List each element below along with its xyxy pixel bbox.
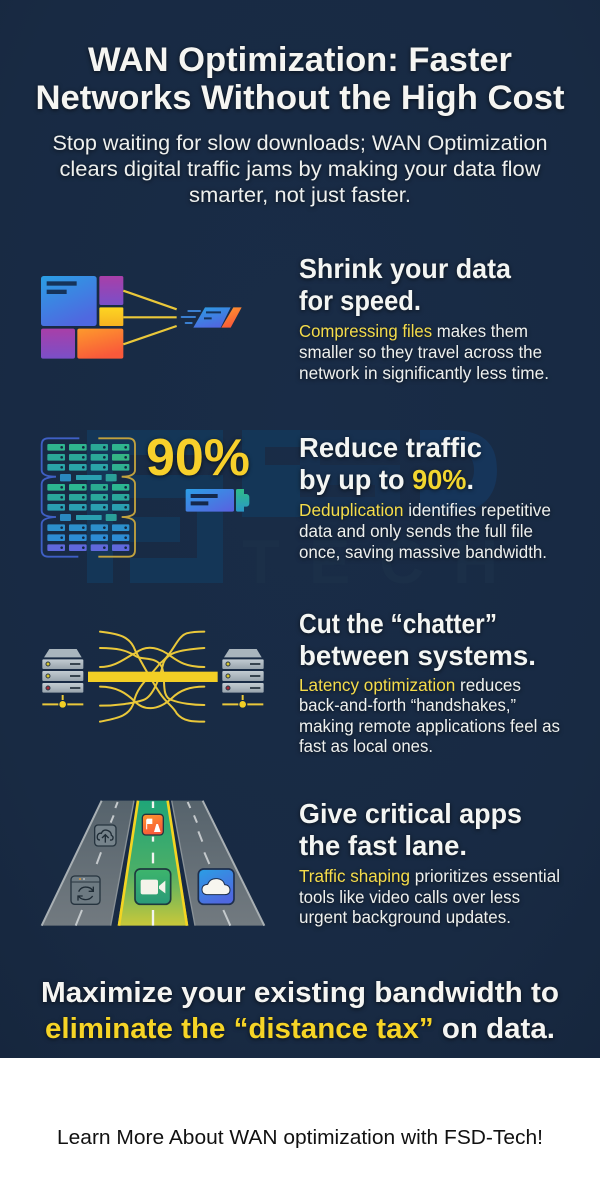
icon: reduced data packet [186,489,249,512]
title: Networks Without the High Cost [36,79,565,117]
body text: Latency optimization reduces [299,675,521,695]
body text [299,675,560,756]
heading [299,432,482,495]
panel: fast lane [42,798,560,927]
body text: Traffic shaping prioritizes essential [299,866,560,886]
body text: once, saving massive bandwidth. [299,542,547,562]
watermark: FSD Tech logo [87,430,498,597]
closing statement [41,977,559,1045]
title: WAN Optimization: Faster [88,41,512,79]
body text [299,500,551,562]
heading [299,798,522,861]
heading: between systems. [299,640,536,671]
heading: for speed. [299,285,421,316]
intro text: Stop waiting for slow downloads; WAN Optimization [52,131,548,155]
body text [299,866,560,927]
body text: Deduplication identifies repetitive [299,500,551,520]
icon: two servers linked by tangled lines [42,632,264,722]
heading: the fast lane. [299,830,467,861]
body text: urgent background updates. [299,907,511,927]
intro text: smarter, not just faster. [189,183,411,207]
icon: three-lane highway with app icons [42,801,264,926]
footer call to action: Learn More About WAN optimization with FSD-Tech! [57,1127,543,1149]
panel: reduce traffic [42,428,551,562]
heading: Reduce traffic [299,432,482,463]
body text: Compressing files makes them [299,321,528,341]
intro text [52,131,548,207]
heading: Cut the “chatter” [299,608,497,639]
big number: 90%: 90% [146,428,250,486]
body text [299,321,549,383]
icon: deduplicated storage grid [42,438,135,557]
heading [299,608,536,671]
body text: data and only sends the full file [299,521,533,541]
body text: smaller so they travel across the [299,342,542,362]
icon: data blocks compressing into a packet [41,276,242,359]
closing statement: eliminate the “distance tax” on data. [45,1013,555,1045]
body text: tools like video calls over less [299,887,520,907]
body text: making remote applications feel as [299,716,560,736]
panel: cut the chatter [42,608,560,756]
heading: by up to 90%. [299,464,474,495]
closing statement: Maximize your existing bandwidth to [41,977,559,1009]
body text: fast as local ones. [299,736,433,756]
intro text: clears digital traffic jams by making your data flow [60,157,541,181]
heading: Give critical apps [299,798,522,829]
title [36,41,565,117]
panel: shrink your data [41,253,549,383]
heading: Shrink your data [299,253,511,284]
body text: back-and-forth “handshakes,” [299,695,516,715]
body text: network in significantly less time. [299,363,549,383]
heading [299,253,511,316]
watermark: FSD Tech logo: TECH [242,528,498,597]
